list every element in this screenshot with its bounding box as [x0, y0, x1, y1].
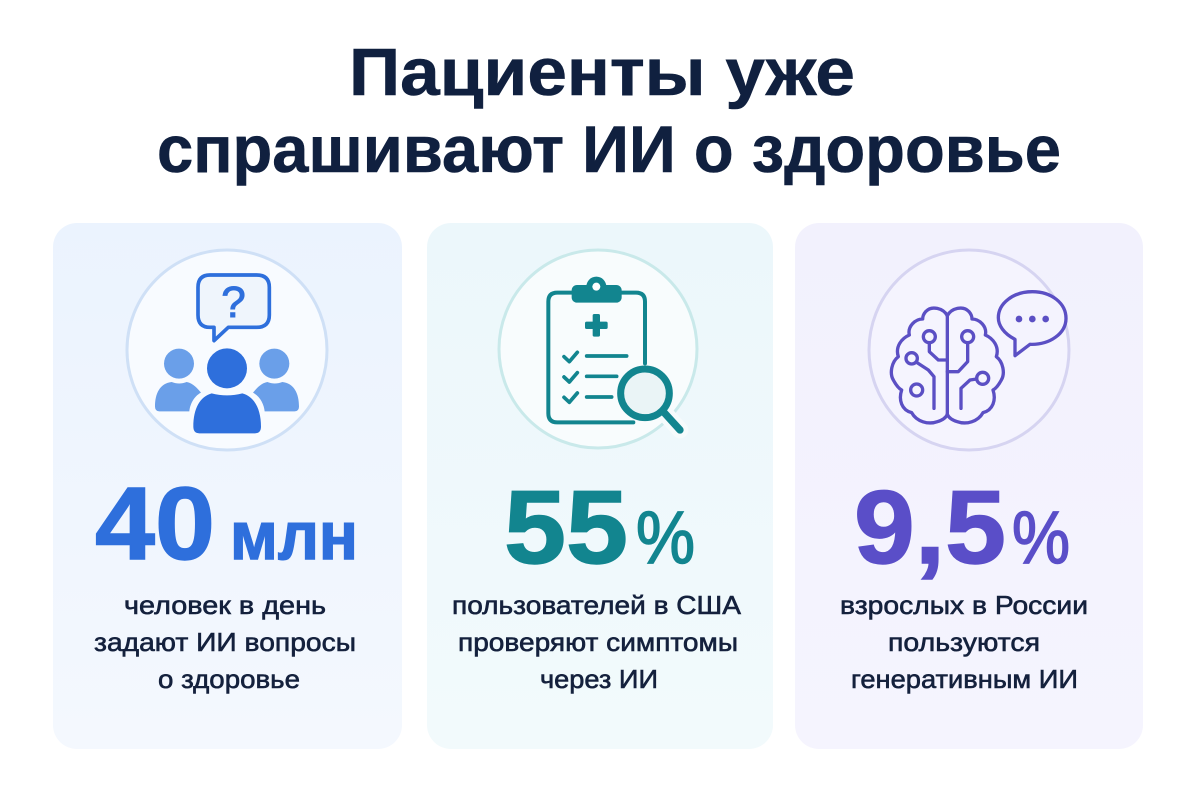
description: пользователей в США — [452, 590, 742, 620]
panel: 40 million people per day — [53, 223, 402, 749]
title: спрашивают ИИ о здоровье — [157, 112, 1061, 186]
description — [452, 590, 742, 694]
description: человек в день — [124, 590, 326, 620]
description: проверяют симптомы — [458, 627, 738, 657]
description: о здоровье — [158, 664, 300, 694]
description: взрослых в России — [840, 590, 1088, 620]
description — [94, 590, 356, 694]
icon: clipboard with magnifier — [499, 250, 697, 448]
stat: 9,5% — [854, 470, 1070, 586]
description — [840, 590, 1088, 694]
stat: 9,5%: % — [1012, 496, 1070, 579]
description: пользуются — [888, 627, 1040, 657]
icon: brain with speech bubble — [869, 250, 1069, 450]
description: задают ИИ вопросы — [94, 627, 356, 657]
description: генеративным ИИ — [851, 664, 1078, 694]
stat: 40 млн — [95, 466, 358, 581]
icon: people with question bubble: ? — [221, 278, 246, 327]
stat: 55%: % — [636, 496, 695, 579]
panel: 55 percent of US users — [427, 223, 773, 749]
description: через ИИ — [540, 664, 658, 694]
title — [157, 35, 1061, 186]
icon: people with question bubble — [127, 250, 327, 450]
panel: 9.5 percent of adults in Russia — [795, 223, 1143, 749]
stat: 55%: 55 — [504, 470, 628, 586]
stat: 40 млн: 40 — [95, 466, 215, 581]
stat: 9,5%: 9,5 — [854, 470, 1006, 586]
stat: 55% — [504, 470, 695, 586]
title: Пациенты уже — [349, 35, 855, 110]
stat: 40 млн: млн — [230, 498, 358, 574]
